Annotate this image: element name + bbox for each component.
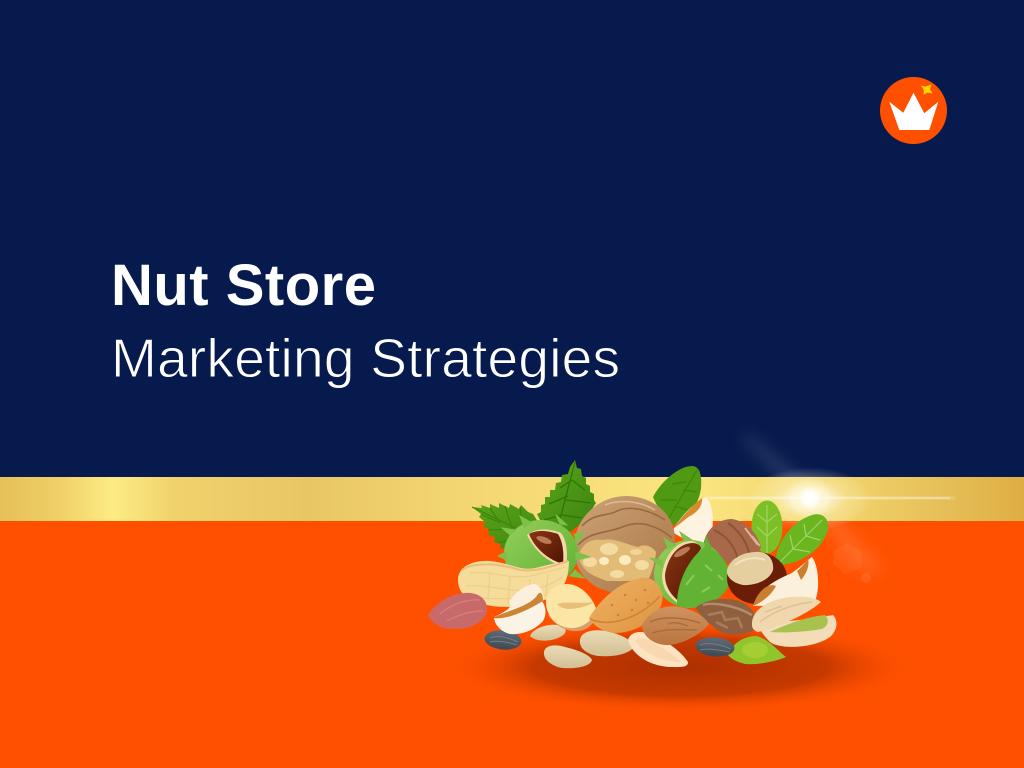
chestnut: right burr: [650, 532, 742, 608]
seed: pine front: [544, 645, 592, 668]
chestnut: left burr: [498, 515, 590, 586]
flare: core: [788, 476, 832, 520]
lens flare: [705, 434, 955, 583]
shell: cracked right: [753, 557, 818, 606]
seed: pine small: [530, 625, 566, 641]
nut: pecan: [695, 599, 757, 635]
nut: walnut kernel: [578, 539, 656, 581]
nut: hazelnut half: [546, 584, 597, 631]
nut: almond large: [589, 578, 663, 633]
nut: peanut shell: [458, 561, 569, 607]
icon: crown: [889, 93, 938, 130]
nut pile illustration: [428, 460, 836, 668]
seed: pine large: [580, 630, 634, 656]
leaf: oval green: [752, 500, 782, 554]
subtitle: Marketing Strategies: [111, 327, 620, 389]
flare: halo: [748, 467, 872, 531]
navy background: [0, 0, 1024, 477]
title: Nut Store: [111, 253, 376, 318]
seed: sunflower right: [695, 636, 735, 658]
flare: lower ray: [815, 515, 885, 575]
flare: streak line: [710, 497, 950, 499]
leaf: top right: [653, 466, 701, 525]
gold band: [0, 477, 1024, 521]
flare: diagonal ray: [740, 434, 825, 503]
flare: streak: [705, 497, 955, 499]
nut: walnut shell: [574, 496, 675, 593]
icon: sparkle: [921, 84, 932, 95]
ground shadow: [442, 621, 918, 713]
shell: pistachio left: [494, 584, 546, 634]
leaf: serrated left: [472, 503, 545, 553]
nut: pistachio: [752, 597, 836, 647]
flare: hexagon: [833, 543, 862, 574]
shell: cracked top: [672, 497, 713, 548]
seed: pumpkin: [628, 632, 688, 667]
seed: sunflower left: [484, 629, 522, 651]
logo: crown badge: [880, 77, 947, 144]
chestnut: cream and brown: [727, 552, 787, 604]
orange background: [0, 521, 1024, 768]
flare: dot: [861, 573, 871, 583]
leaf: tilted green: [775, 514, 828, 565]
leaf: serrated upper: [537, 460, 596, 537]
nut: almond small: [642, 606, 709, 645]
nut: red peanut: [428, 593, 487, 629]
nut: hazelnut brown: [703, 519, 761, 563]
seed: pumpkin green: [728, 636, 786, 664]
